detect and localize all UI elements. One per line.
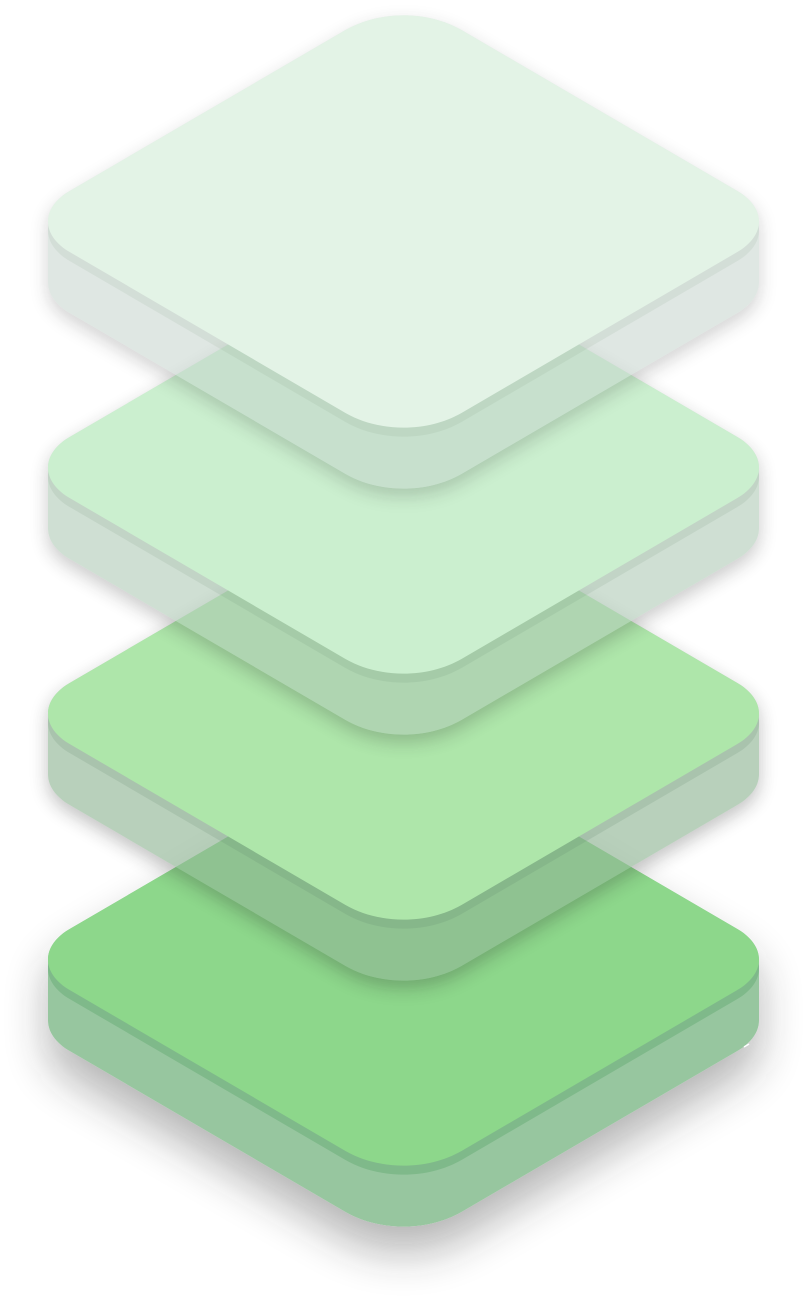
top face: third plate — [48, 507, 759, 920]
layer 1: top plate — [48, 15, 759, 496]
inner edge: second plate — [48, 270, 759, 683]
shadow: bottom plate — [48, 779, 759, 1253]
side wall: third plate — [48, 507, 759, 981]
side wall: top plate — [48, 15, 759, 489]
side wall: second plate — [48, 261, 759, 735]
layer 3: third plate — [38, 590, 768, 996]
top face: second plate — [48, 261, 759, 674]
top face: bottom plate — [48, 753, 759, 1166]
inner edge: bottom plate — [48, 762, 759, 1175]
top face: top plate — [48, 15, 759, 428]
layer 2: second plate — [40, 344, 768, 750]
inner edge: third plate — [48, 516, 759, 929]
shadow: second plate — [40, 374, 768, 750]
shadow: top plate — [48, 22, 759, 496]
shadow: third plate — [38, 620, 768, 996]
layer 4: bottom plate — [48, 753, 759, 1253]
side wall: bottom plate — [48, 753, 759, 1227]
inner edge: top plate — [48, 24, 759, 437]
